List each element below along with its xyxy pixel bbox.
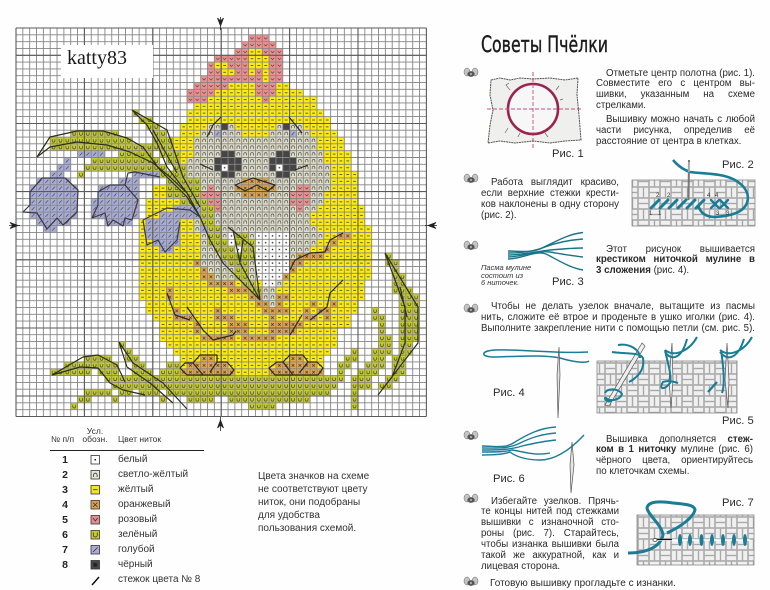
panel: cross-stitch chart xyxy=(9,17,437,431)
text: hide thread ends xyxy=(481,496,619,572)
note about symbol colors xyxy=(258,471,369,534)
legend header: Усл. xyxy=(87,426,103,436)
legend table: 3 xyxy=(62,484,68,496)
figure 2: cross stitches on fabric: 3 xyxy=(726,211,730,217)
icon: bee 3 xyxy=(464,241,478,250)
text: hide thread ends: лицевая сторона. xyxy=(481,561,560,572)
icon: bee 7 xyxy=(464,577,478,586)
text: stitch direction: ков наклонены в одну сторону xyxy=(481,199,619,210)
text: backstitch: ком в 1 ниточку мулине (рис. 6) xyxy=(596,444,753,455)
legend table: голубой xyxy=(118,544,155,555)
note: floss strands: состоит из xyxy=(481,271,523,280)
figure 2: cross stitches on fabric: 1 xyxy=(658,211,662,217)
legend table: 5 xyxy=(62,514,68,526)
text: start anywhere xyxy=(596,114,755,147)
grid lines xyxy=(16,28,426,416)
note: floss strands: Пасма мулине xyxy=(481,263,531,272)
text: hide thread ends: чтобы изнанка вышивки была xyxy=(481,539,619,550)
text: mark the canvas center: стрелками. xyxy=(596,100,646,111)
text: hide thread ends: те концы нитей под стежками xyxy=(481,506,619,517)
figure 3: floss strand xyxy=(508,232,583,270)
text: stitch type xyxy=(596,244,755,276)
text: stitch type: крестиком ниточкой мулине в xyxy=(596,254,755,265)
chick face: light yellow xyxy=(187,123,331,307)
text: stitch direction: (рис. 2). xyxy=(481,210,517,221)
backstitch lines: bell flowers xyxy=(23,172,200,252)
figure 5: needle and loop stitches xyxy=(597,337,752,413)
chick body: yellow xyxy=(139,48,372,376)
note about symbol colors: ниток, они подобраны xyxy=(258,497,360,508)
caption: Рис. 4: Рис. 4 xyxy=(493,387,525,399)
center arrow: top xyxy=(218,17,224,30)
text: hide thread ends: роны (рис. 7). Старайтесь, xyxy=(481,528,619,539)
text: stitch type: 3 сложения (рис. 4). xyxy=(596,265,689,276)
chick crest: pink xyxy=(187,35,283,103)
legend table: светло-жёлтый xyxy=(118,469,188,480)
center arrow: bottom xyxy=(218,417,224,431)
icon: bee 6 xyxy=(464,494,478,503)
legend table: жёлтый xyxy=(118,484,153,495)
chick belly: white xyxy=(221,164,290,287)
icon: bee 2 xyxy=(464,174,478,183)
legend header: обозн. xyxy=(82,434,108,444)
icon: bee 1 xyxy=(464,68,478,77)
figure 7: running stitch on fabric xyxy=(628,502,754,565)
center arrow: left xyxy=(9,222,20,228)
text: mark the canvas center xyxy=(596,68,755,111)
legend table xyxy=(62,454,200,585)
text: avoid knots at start xyxy=(481,301,755,334)
text: hide thread ends: Избегайте узелков. Прячь- xyxy=(491,496,619,506)
figure 2: cross stitches on fabric xyxy=(632,160,755,226)
backstitch lines: leaves xyxy=(37,110,418,409)
bell flowers: blue xyxy=(30,130,296,253)
text: hide thread ends: такой же аккуратной, как и xyxy=(481,550,619,561)
text: start anywhere: Вышивку можно начать с любой xyxy=(606,114,755,125)
note about symbol colors: Цвета значков на схеме xyxy=(258,471,369,482)
text: stitch type: Этот рисунок вышивается xyxy=(606,244,755,254)
label box: katty83 xyxy=(61,45,153,78)
chick cheeks: pink xyxy=(201,185,310,212)
heavy grid lines every ten cells xyxy=(16,28,426,416)
legend table: стежок цвета № 8 xyxy=(118,574,200,585)
text: mark the canvas center: Отметьте центр полотна (рис. 1). xyxy=(606,68,755,78)
label box: katty83: katty83 xyxy=(67,47,127,69)
figure 2: cross stitches on fabric: 4 xyxy=(707,193,711,199)
legend table: 8 xyxy=(62,559,68,571)
caption: Рис. 7: Рис. 7 xyxy=(722,497,754,509)
text: backstitch: по клеточкам схемы. xyxy=(596,466,689,477)
note: floss strands xyxy=(481,263,531,287)
legend table: зелёный xyxy=(118,529,157,540)
text: backstitch: Вышивка дополняется стеж- xyxy=(606,434,753,444)
legend table: оранжевый xyxy=(118,499,171,510)
caption: Рис. 2: Рис. 2 xyxy=(722,159,754,171)
center arrow: right xyxy=(425,222,437,228)
text: avoid knots at start: Выполните закрепление нити с помощью петли (см. рис. 5). xyxy=(481,323,755,334)
legend table: 6 xyxy=(62,529,68,541)
legend header: Цвет ниток xyxy=(118,434,161,444)
legend header: № п/п xyxy=(51,434,74,444)
legend table: 7 xyxy=(62,544,68,556)
caption: Рис. 3: Рис. 3 xyxy=(552,276,584,288)
legend table: чёрный xyxy=(118,559,153,570)
figure 2: cross stitches on fabric: 2 xyxy=(667,193,671,199)
figure 2: cross stitches on fabric: 2 xyxy=(656,193,660,199)
figure 4: threaded needle xyxy=(484,347,589,418)
note: floss strands: 6 ниточек. xyxy=(481,278,519,287)
text: stitch direction xyxy=(481,177,619,221)
text: iron from the wrong side: Готовую вышивку прогладьте с изнанки. xyxy=(490,578,676,588)
chick eyes: black xyxy=(214,123,296,178)
figure 6: strand and needle xyxy=(482,427,584,493)
wings, beak and feet: orange xyxy=(166,178,351,376)
text: mark the canvas center: Совместите его с центром вы- xyxy=(596,78,755,89)
title: Советы Пчёлки: Советы Пчёлки xyxy=(481,33,608,58)
caption: Рис. 1: Рис. 1 xyxy=(552,148,584,160)
text: hide thread ends: вышивки с изнаночной сто- xyxy=(481,517,619,528)
icon: bee 5 xyxy=(464,431,478,440)
stitch grid with colored cells xyxy=(16,28,426,416)
note about symbol colors: для удобства xyxy=(258,510,320,521)
text: backstitch: чёрного цвета, ориентируйтесь xyxy=(596,455,753,466)
note about symbol colors: пользования схемой. xyxy=(258,523,356,534)
legend table: 1 xyxy=(62,454,68,466)
note about symbol colors: не соответствуют цвету xyxy=(258,484,368,495)
text: start anywhere: части рисунка, определив её xyxy=(596,125,755,136)
text: stitch direction: Работа выглядит красиво, xyxy=(491,177,619,188)
icon: bee 4 xyxy=(464,304,478,313)
legend table: 4 xyxy=(62,499,68,511)
text: start anywhere: расстояние от центра в клетках. xyxy=(596,136,741,147)
text: stitch direction: если верхние стежки крести- xyxy=(481,188,619,199)
figure 2: cross stitches on fabric: 4 xyxy=(715,193,719,199)
figure 2: cross stitches on fabric: 3 xyxy=(716,211,720,217)
text: avoid knots at start: Чтобы не делать узелок вначале, вытащите из пасмы xyxy=(491,301,755,312)
caption: Рис. 5: Рис. 5 xyxy=(722,415,754,427)
figure 2: cross stitches on fabric: 1 xyxy=(649,211,653,217)
figure 1: fabric in hoop xyxy=(487,72,583,150)
legend table: белый xyxy=(118,454,147,465)
legend table: 2 xyxy=(62,469,68,481)
caption: Рис. 6: Рис. 6 xyxy=(493,473,525,485)
legend table: розовый xyxy=(118,514,157,525)
text: avoid knots at start: нить, сложите её втрое и проденьте в ушко иголки (рис. 4). xyxy=(481,312,755,323)
legend header xyxy=(50,428,204,451)
backstitch lines: chick face, wings and feet xyxy=(167,117,343,375)
leaves: green xyxy=(50,110,420,410)
text: backstitch xyxy=(596,434,753,477)
text: mark the canvas center: шивки, указанным на схеме xyxy=(596,89,755,100)
